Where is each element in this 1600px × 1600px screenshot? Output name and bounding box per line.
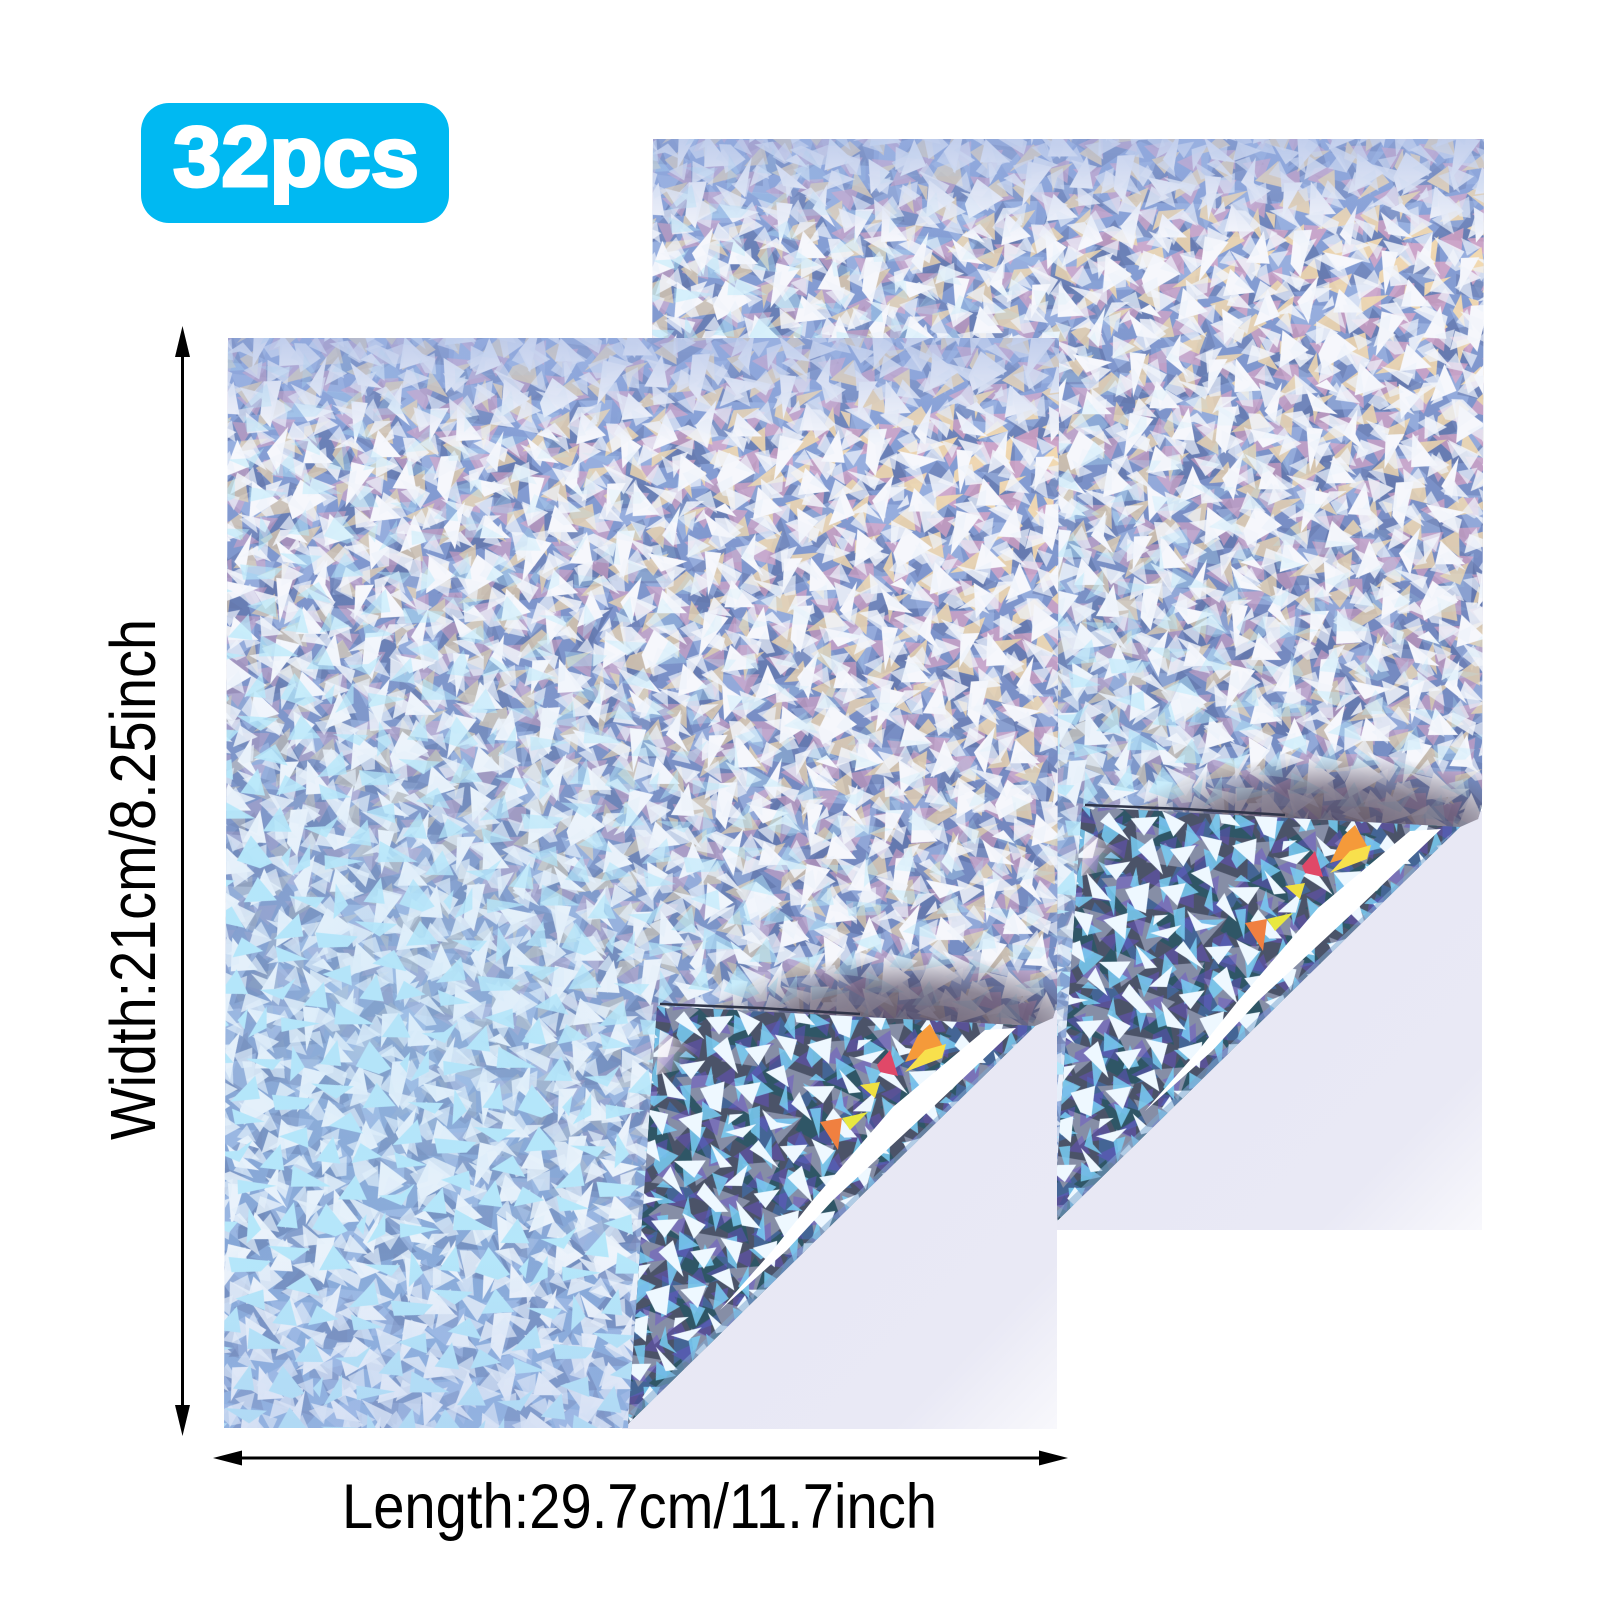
white highlight along the curl [720, 1028, 1016, 1310]
peeled corner showing bright foil [620, 1000, 1060, 1430]
badge: 32pcs: 32pcs [173, 110, 419, 205]
arrow: vertical width dimension [175, 326, 190, 1436]
holographic foil surface [200, 330, 1080, 1440]
label: length: Length:29.7cm/11.7inch [342, 1472, 937, 1542]
adhesive backing paper [622, 1010, 1057, 1429]
dark fold line [660, 1004, 860, 1014]
badge: 32pcs [141, 103, 449, 223]
front holographic sheet [200, 330, 1080, 1440]
arrow: horizontal length dimension [213, 1450, 1068, 1466]
edge strip of the curl [630, 1028, 1032, 1420]
back holographic sheet [625, 131, 1505, 1241]
label: width: Width:21cm/8.25inch [97, 619, 169, 1140]
